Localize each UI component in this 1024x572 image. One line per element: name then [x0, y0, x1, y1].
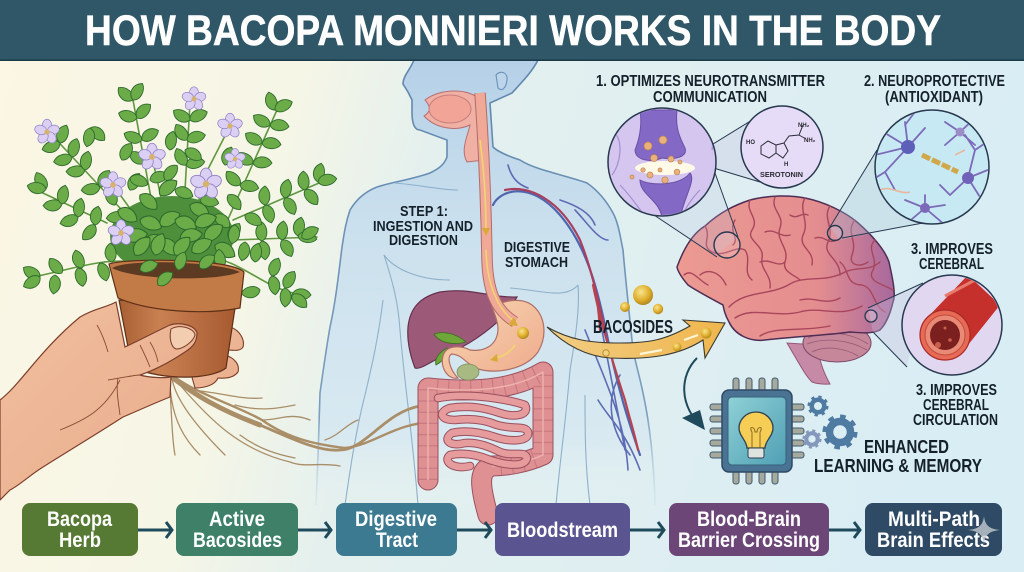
- brainstem: [787, 343, 830, 384]
- organ: gallbladder: [434, 333, 466, 365]
- vessel tube: [930, 278, 998, 344]
- callout: neurons circle: [874, 109, 990, 225]
- label: neurotransmitter: 1. OPTIMIZES NEUROTRANSMITTER: [596, 73, 825, 90]
- soil and overhanging leaves: [112, 262, 240, 278]
- callout: blood vessel circle: [902, 275, 1002, 375]
- leaves: [20, 80, 338, 311]
- organ: stomach: [442, 300, 544, 378]
- fingers: [190, 327, 243, 388]
- arm and chest contours: [345, 183, 590, 505]
- mouth cavity and throat: [424, 91, 484, 162]
- neuron bodies: [901, 140, 915, 154]
- step: digestive tract: Digestive: [355, 508, 437, 531]
- chip pins: [710, 378, 804, 484]
- callout: serotonin molecule: [741, 106, 823, 188]
- bacoside in stomach: [517, 327, 529, 339]
- chip body: [722, 390, 792, 472]
- flow strip: [22, 503, 1002, 556]
- gyri: [684, 197, 893, 336]
- formula labels: HO: [746, 140, 755, 146]
- presynaptic terminal: [635, 110, 685, 160]
- organ: liver: [408, 291, 517, 368]
- formula labels: NH₂: [804, 138, 816, 144]
- cerebellum: [803, 324, 871, 362]
- label: step 1: INGESTION AND: [373, 218, 473, 235]
- label: enhanced learning and memory: ENHANCED: [864, 436, 949, 457]
- flowers: [33, 87, 246, 247]
- step: blood-brain barrier crossing: Blood-Brain: [697, 508, 801, 531]
- label: step 1: [373, 203, 473, 249]
- step: bloodstream: Bloodstream: [507, 519, 618, 542]
- step: digestive tract: Tract: [376, 529, 418, 552]
- formula labels: [746, 123, 816, 179]
- label: neurotransmitter: COMMUNICATION: [653, 89, 767, 106]
- roots: [170, 378, 437, 466]
- flow arrows: [138, 522, 860, 538]
- formula labels: NH₂: [798, 123, 810, 129]
- bacoside spheres: [620, 285, 663, 314]
- label: step 1: STEP 1:: [400, 203, 448, 220]
- label: neuroprotective: [864, 73, 1005, 106]
- label: improves cerebral circulation: 3. IMPROVES: [916, 382, 997, 399]
- formula labels: H: [784, 162, 788, 168]
- step: multi-path brain effects: Multi-Path: [888, 508, 980, 531]
- step: active bacosides: Bacosides: [193, 529, 282, 552]
- step: active bacosides: [176, 503, 298, 556]
- label: digestive stomach: STOMACH: [505, 254, 568, 271]
- bacosides arrow: [547, 320, 725, 358]
- food remnants: [457, 364, 479, 380]
- myelinated axon: [922, 155, 958, 172]
- stems: [30, 100, 333, 293]
- label: improves cerebral: 3. IMPROVES: [911, 241, 993, 258]
- icon: chip with light bulb: [710, 378, 804, 484]
- vesicles: [630, 136, 682, 183]
- hand and thumb: [0, 302, 197, 500]
- step: blood-brain barrier crossing: [669, 503, 829, 556]
- label: improves cerebral circulation: CIRCULATION: [913, 412, 998, 429]
- callout: synapse circle: [608, 108, 716, 218]
- label: improves cerebral: CEREBRAL: [919, 256, 984, 273]
- step: digestive tract: [336, 503, 457, 556]
- icon: gears: [804, 397, 855, 447]
- step: bloodstream: [495, 503, 630, 556]
- arrow particles: [603, 328, 712, 356]
- label: improves cerebral circulation: [913, 382, 998, 429]
- label: step 1: DIGESTION: [389, 232, 458, 249]
- step: bacopa herb: [22, 503, 138, 556]
- label: bacosides: BACOSIDES: [593, 317, 673, 337]
- esophagus with arrow: [480, 93, 518, 362]
- ear: [496, 72, 507, 90]
- label: neurotransmitter: [596, 73, 825, 106]
- light bulb: [739, 412, 773, 448]
- step: bacopa herb: Herb: [59, 529, 101, 552]
- cerebrum: [677, 196, 894, 340]
- blood vessels: [493, 165, 640, 470]
- organ: large intestine: [428, 372, 543, 515]
- step: blood-brain barrier crossing: Barrier Crossing: [678, 529, 820, 552]
- sparkle mark: [968, 516, 1000, 545]
- dark curved arrow: [682, 358, 705, 430]
- step: multi-path brain effects: [865, 503, 1002, 556]
- panel: plant in hand: [0, 80, 338, 500]
- label: improves cerebral: [911, 241, 993, 273]
- formula labels: SEROTONIN: [760, 170, 803, 179]
- label: digestive stomach: DIGESTIVE: [504, 239, 570, 256]
- pot: [119, 300, 235, 377]
- panel: brain: [677, 196, 894, 384]
- label: enhanced learning and memory: [814, 436, 983, 476]
- postsynaptic terminal: [640, 173, 692, 218]
- title bar: [0, 0, 1024, 61]
- body silhouette: [316, 60, 655, 505]
- label: neuroprotective: (ANTIOXIDANT): [885, 89, 983, 106]
- label: enhanced learning and memory: LEARNING & MEMORY: [814, 455, 983, 476]
- callout lines: [642, 117, 923, 367]
- foliage mass: [110, 196, 234, 276]
- label: improves cerebral circulation: CEREBRAL: [923, 397, 989, 414]
- organ: small intestine: [438, 396, 528, 467]
- step: active bacosides: Active: [209, 508, 265, 531]
- step: bacopa herb: Bacopa: [47, 508, 112, 531]
- label: digestive stomach: [504, 239, 570, 271]
- thumbnail and knuckle lines: [60, 325, 195, 430]
- body outline: [316, 60, 655, 505]
- step: multi-path brain effects: Brain Effects: [877, 529, 990, 552]
- panel: human body: [316, 60, 655, 505]
